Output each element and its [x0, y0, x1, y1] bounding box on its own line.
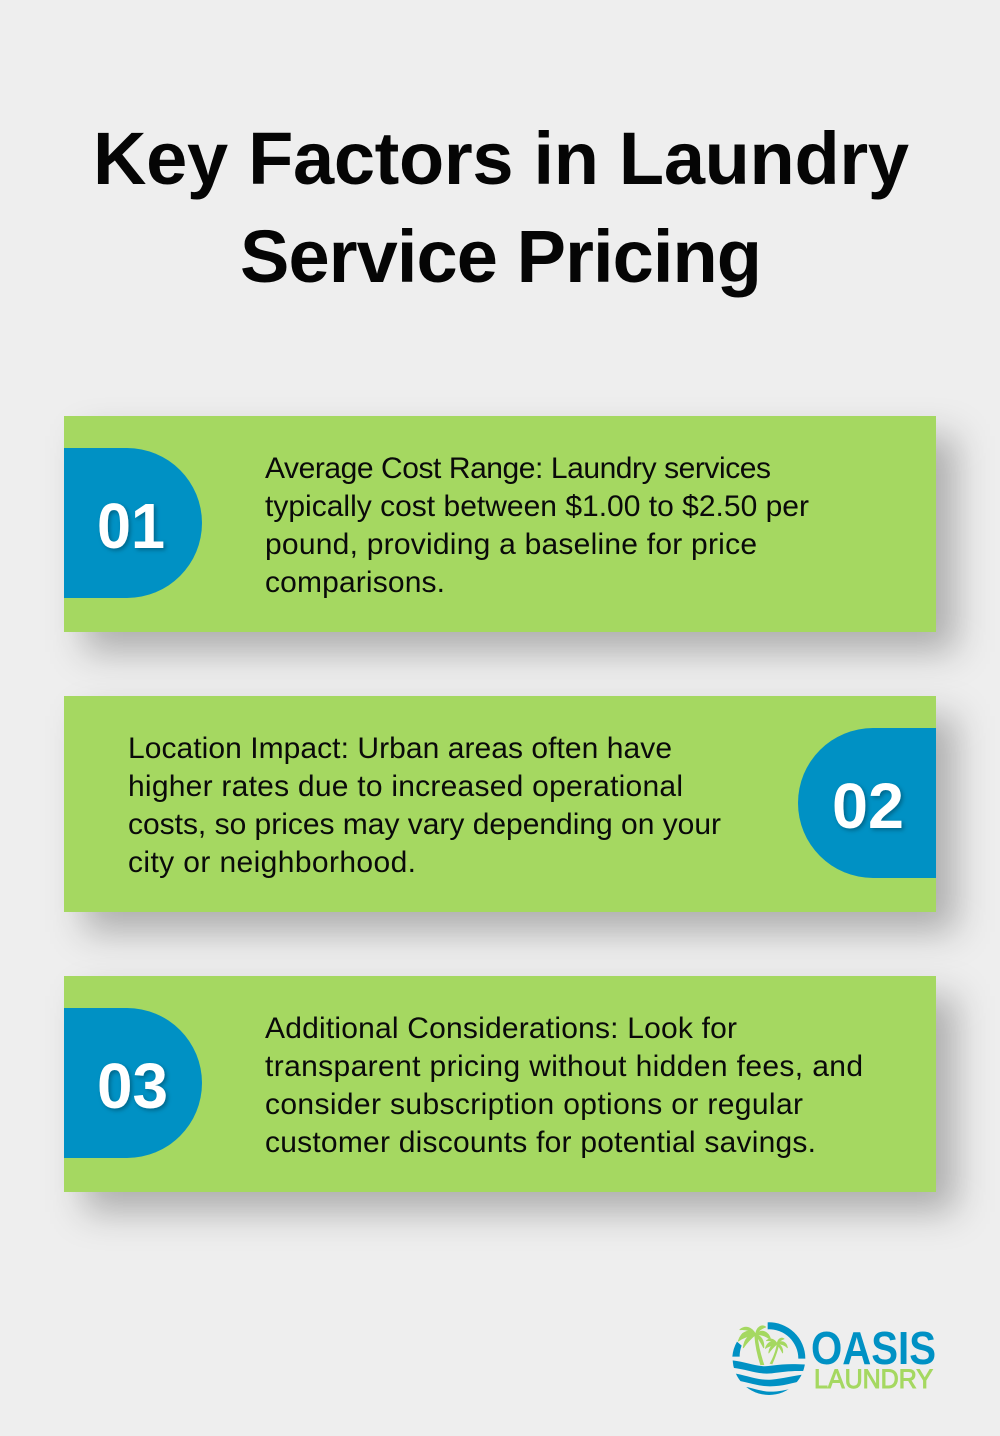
logo: Oasis Laundry [732, 1322, 934, 1395]
panel: average cost range [64, 416, 956, 652]
number badge 02: 02 [832, 770, 904, 842]
text: average cost range: comparisons. [265, 566, 445, 599]
number badge 01 [64, 448, 202, 598]
text: additional considerations [265, 1012, 863, 1159]
text: additional considerations: customer discounts for potential savings. [265, 1126, 816, 1159]
text: average cost range: pound, providing a baseline for price [265, 528, 757, 561]
title [93, 117, 909, 298]
wordmark [811, 1322, 936, 1394]
text: average cost range: typically cost between $1.00 to $2.50 per [265, 490, 809, 523]
panel: location impact [64, 696, 956, 932]
text: additional considerations: transparent pricing without hidden fees, and [265, 1050, 863, 1083]
text: location impact: city or neighborhood. [128, 846, 416, 879]
panel: additional considerations [64, 976, 956, 1212]
number badge 03: 03 [97, 1050, 168, 1122]
wordmark: LAUNDRY [814, 1364, 933, 1394]
text: additional considerations: consider subscription options or regular [265, 1088, 803, 1121]
text: location impact: higher rates due to increased operational [128, 770, 683, 803]
text: additional considerations: Additional Considerations: Look for [265, 1012, 737, 1045]
icon: palm trees and waves [732, 1322, 806, 1395]
text: average cost range: Average Cost Range: Laundry services [265, 452, 771, 485]
title: Service Pricing [240, 215, 762, 298]
text: average cost range [265, 452, 809, 599]
text: location impact: costs, so prices may vary depending on your [128, 808, 721, 841]
number badge 01: 01 [97, 490, 165, 562]
text: location impact [128, 732, 721, 879]
title: Key Factors in Laundry [93, 117, 909, 200]
text: location impact: Location Impact: Urban areas often have [128, 732, 672, 765]
wordmark: OASIS [811, 1322, 936, 1374]
number badge 03 [64, 1008, 202, 1158]
number badge 02 [798, 728, 936, 878]
